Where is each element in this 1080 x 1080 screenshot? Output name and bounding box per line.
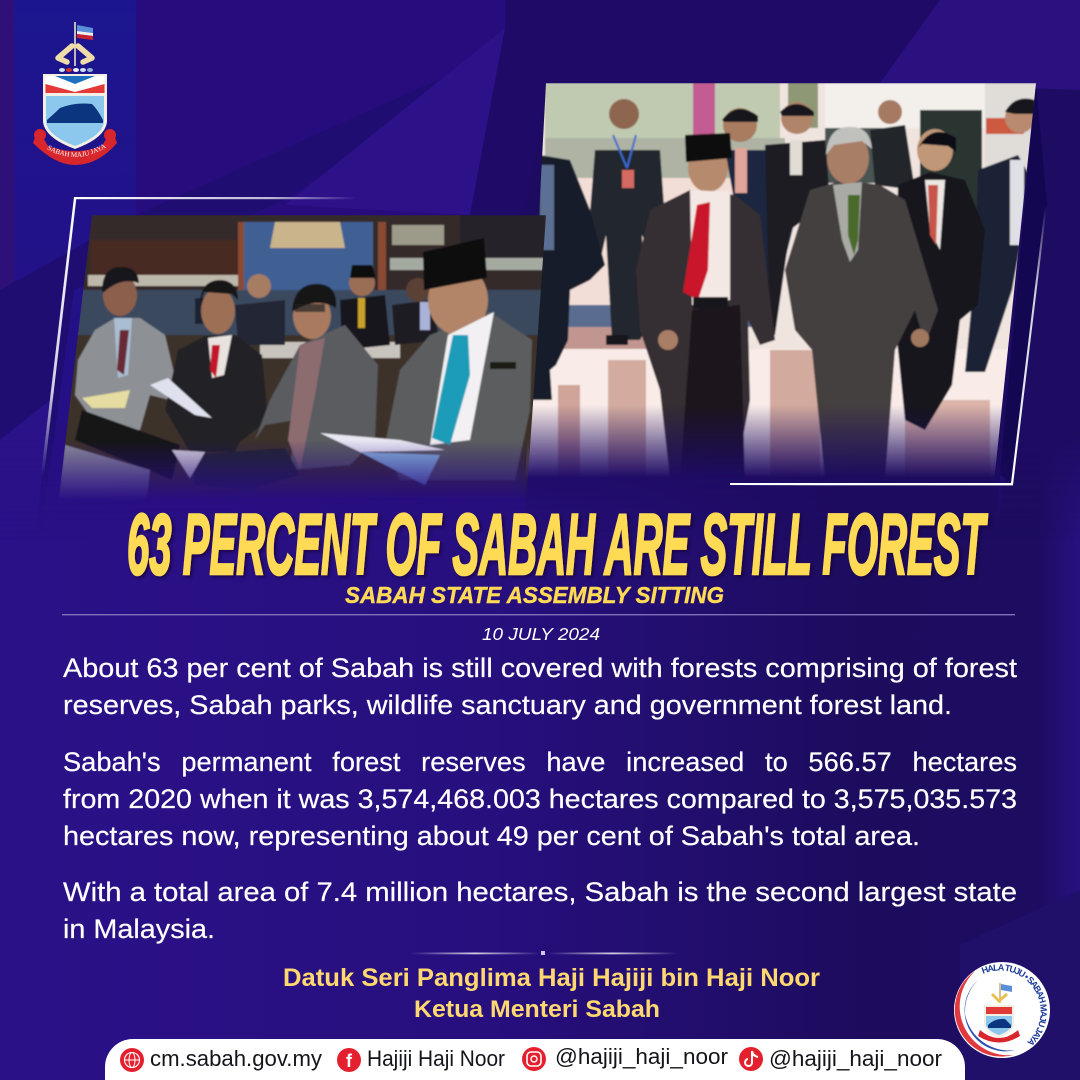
photo background: assembly hall	[50, 215, 550, 505]
subtitle: SABAH STATE ASSEMBLY SITTING	[345, 582, 724, 608]
crest arms	[58, 46, 92, 62]
date: 10 JULY 2024	[482, 624, 600, 644]
divider	[62, 614, 1015, 615]
person: grey suit man	[785, 127, 938, 480]
person: right black suit	[895, 129, 985, 430]
facebook name: Hajiji Haji Noor	[367, 1046, 505, 1071]
text block: paragraph 2: hectares now, representing about 49 per cent of Sabah's total area.	[63, 821, 920, 851]
panel: left photo of assembly members	[50, 215, 550, 505]
icon: tiktok	[739, 1047, 763, 1071]
background person: lanyard man	[870, 100, 915, 190]
text block: paragraph 1: About 63 per cent of Sabah is still covered with forests comprising of forest	[63, 653, 1018, 683]
crest scroll: SABAH MAJU JAYA	[47, 144, 106, 157]
text block: paragraph 3: in Malaysia.	[63, 914, 215, 944]
crest shield	[43, 74, 107, 149]
panel: left photo white frame	[41, 197, 356, 475]
background people row	[195, 265, 440, 350]
attribution: role: Ketua Menteri Sabah	[414, 996, 660, 1023]
background person: navy suit centre	[722, 108, 794, 289]
panel: right photo white frame	[730, 205, 1047, 485]
crest flag	[75, 22, 93, 66]
background person: far right	[965, 98, 1035, 372]
icon: facebook: f	[346, 1051, 353, 1071]
text block: paragraph 3	[63, 877, 1017, 944]
icon: website globe	[120, 1048, 144, 1072]
tiktok handle: @hajiji_haji_noor	[769, 1046, 942, 1071]
text block: paragraph 3: With a total area of 7.4 million hectares, Sabah is the second largest state	[63, 877, 1017, 907]
icon: instagram	[522, 1047, 546, 1071]
icon: facebook	[337, 1048, 361, 1072]
person: grey suit with lanyard	[255, 284, 378, 470]
photo background: lobby	[520, 83, 1040, 484]
person: grey suit with teal tie and songkok	[320, 238, 532, 485]
person: red tie man with songkok	[636, 133, 775, 480]
text block: paragraph 1	[63, 653, 1018, 720]
text block: paragraph 2	[63, 747, 1017, 851]
icon: Hala Tuju badge: HALA TUJU • SABAH MAJU JAYA	[981, 964, 1047, 1045]
desk, laptop and bag	[60, 410, 299, 496]
icon: Hala Tuju badge	[954, 962, 1050, 1058]
text block: paragraph 1: reserves, Sabah parks, wildlife sanctuary and government forest land.	[63, 690, 952, 720]
text block: paragraph 2: from 2020 when it was 3,574,468.003 hectares compared to 3,575,035.573	[63, 784, 1017, 814]
footer social bar	[105, 1039, 965, 1080]
text block: paragraph 2: Sabah's permanent forest reserves have increased to 566.57 hectares	[63, 747, 1017, 777]
crest scroll	[33, 129, 117, 165]
icon: Sabah state crest	[33, 22, 117, 165]
person: black suit with red tie	[150, 280, 268, 452]
background person: black suit centre	[765, 102, 830, 335]
website: cm.sabah.gov.my	[150, 1046, 322, 1071]
person: grey suit with striped tie	[75, 267, 178, 430]
crest beads	[59, 68, 93, 72]
panel: right photo of leaders walking	[520, 83, 1040, 484]
ornament divider	[410, 951, 678, 955]
background person: security officer	[586, 99, 668, 345]
instagram handle: @hajiji_haji_noor	[555, 1044, 728, 1069]
person: left suit	[525, 155, 605, 400]
attribution: name: Datuk Seri Panglima Haji Hajiji bin Haji Noor	[283, 964, 820, 992]
